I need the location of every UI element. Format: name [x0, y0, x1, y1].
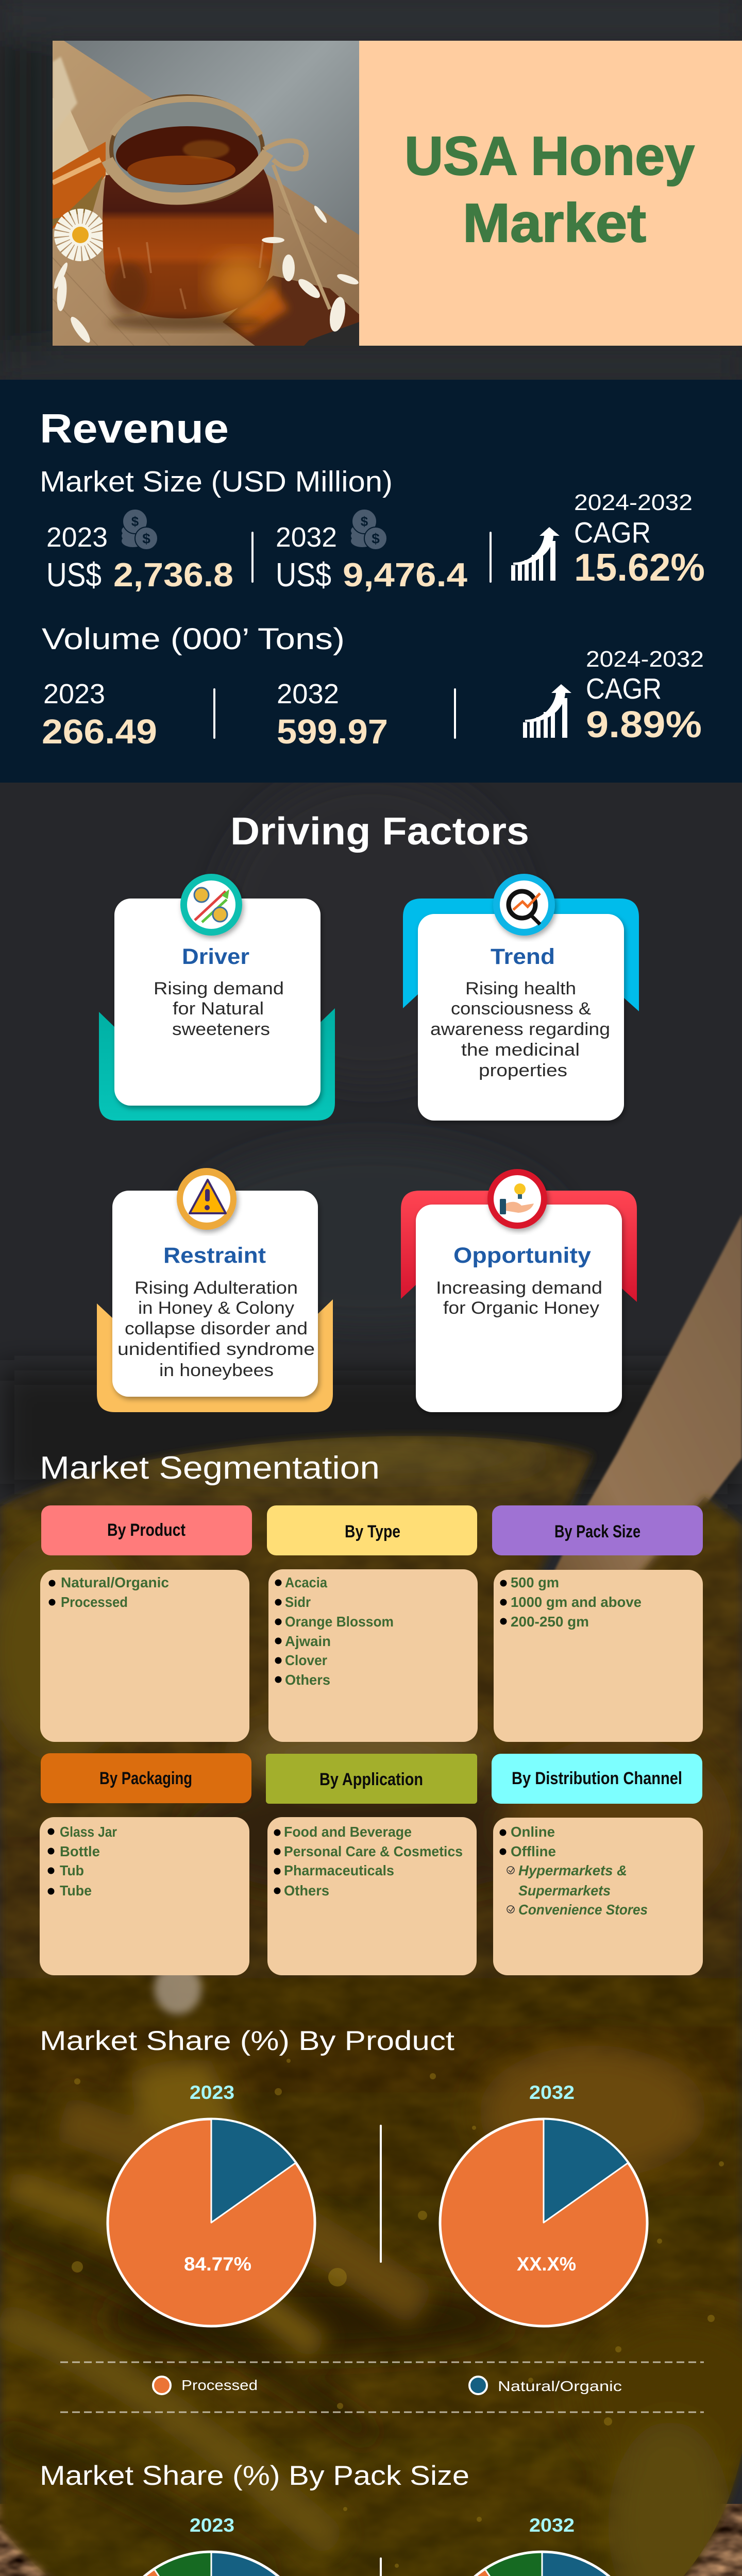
- icon: coins 2032: $: [372, 531, 380, 547]
- segment: by product: Processed: [61, 1594, 128, 1610]
- panel: trend: [403, 874, 639, 1121]
- icon: petals: [52, 205, 360, 345]
- heading: revenue: Revenue: [40, 405, 229, 451]
- year 2023: 2023: [190, 2515, 234, 2536]
- legend: product: Natural/Organic: [498, 2378, 622, 2394]
- volume 2032: [277, 679, 388, 751]
- segment: by application: Pharmaceuticals: [284, 1862, 394, 1878]
- CAGR market size: 15.62%: [574, 546, 705, 589]
- volume 2032: 2032: [277, 679, 339, 709]
- segment: by type: Ajwain: [285, 1633, 331, 1649]
- title panel: [359, 41, 742, 346]
- segment: by distribution channel: By Distribution Channel: [512, 1769, 682, 1788]
- segment: by distribution channel: Supermarkets: [518, 1883, 611, 1899]
- heading: market share by pack size: Market Share (%) By Pack Size: [40, 2461, 469, 2491]
- CAGR market size: CAGR: [574, 516, 651, 549]
- segment: by application: Personal Care & Cosmetics: [284, 1843, 463, 1859]
- volume 2023: 2023: [43, 679, 105, 709]
- market size 2032: 2032: [276, 522, 337, 553]
- heading: market segmentation: Market Segmentation: [40, 1450, 380, 1486]
- segment: by pack size: By Pack Size: [554, 1522, 640, 1541]
- market size 2032: 9,476.4: [343, 556, 467, 594]
- icon: growth arrow: [523, 684, 571, 738]
- driver text: sweeteners: [172, 1020, 270, 1039]
- title: [404, 126, 695, 253]
- segment: by pack size: 200-250 gm: [511, 1614, 589, 1630]
- hero photo: honey jar: [52, 41, 360, 346]
- icon: coins 2023: $: [131, 514, 139, 529]
- year 2032: 2032: [529, 2082, 575, 2103]
- icon: trend: [493, 874, 555, 936]
- trend text: the medicinal: [461, 1040, 580, 1060]
- volume 2023: [42, 679, 157, 751]
- icon: coins 2032: $: [361, 514, 368, 529]
- segment: by application: Others: [284, 1883, 329, 1899]
- divider: [454, 688, 456, 739]
- segment: by pack size: 1000 gm and above: [511, 1594, 642, 1610]
- restraint text: in Honey & Colony: [138, 1298, 294, 1318]
- opportunity text: [436, 1278, 602, 1318]
- segment: by application: Food and Beverage: [284, 1824, 412, 1840]
- market size 2023: 2,736.8: [113, 556, 233, 594]
- segment: by type: Orange Blossom: [285, 1614, 394, 1630]
- trend heading: Trend: [491, 944, 555, 969]
- market size 2032: US$: [276, 556, 331, 594]
- opportunity text: for Organic Honey: [443, 1298, 599, 1318]
- segment: by type: [267, 1505, 478, 1742]
- heading: market size: Market Size (USD Million): [40, 465, 393, 498]
- divider: [251, 532, 254, 583]
- segment: by product: [40, 1505, 252, 1742]
- panel: opportunity: [401, 1169, 637, 1412]
- segment: by pack size: 500 gm: [511, 1574, 559, 1590]
- segment: by distribution channel: [492, 1754, 703, 1975]
- panel: revenue: [0, 380, 742, 783]
- segment: by type: Acacia: [285, 1574, 327, 1590]
- opportunity heading: Opportunity: [453, 1243, 591, 1268]
- CAGR volume: CAGR: [586, 672, 662, 705]
- icon: daisy: [62, 216, 99, 253]
- icon: coins 2023: [122, 509, 158, 550]
- trend text: consciousness &: [451, 999, 591, 1019]
- segment: by type: Others: [285, 1672, 330, 1688]
- segment: by distribution channel: Convenience Stores: [518, 1902, 648, 1918]
- segment: by type: By Type: [345, 1522, 400, 1541]
- segment: by packaging: Bottle: [60, 1843, 100, 1859]
- heading: volume: Volume (000’ Tons): [42, 622, 345, 656]
- panel: restraint: [97, 1168, 333, 1412]
- restraint text: [117, 1278, 315, 1380]
- restraint text: collapse disorder and: [125, 1319, 308, 1338]
- pie chart: product 2032: [440, 2119, 647, 2326]
- segment: by packaging: Glass Jar: [60, 1824, 117, 1840]
- pie chart: pack size 2023: [107, 2552, 315, 2576]
- volume 2032: 599.97: [277, 713, 388, 751]
- pie chart: pack size 2032: [438, 2552, 646, 2576]
- segment: by application: [266, 1754, 477, 1975]
- segment: by packaging: [40, 1753, 251, 1975]
- icon: opportunity: [487, 1169, 547, 1229]
- market size 2032: [276, 522, 467, 594]
- pie chart: product 2023: [108, 2119, 315, 2326]
- legend: product: Processed: [181, 2377, 258, 2393]
- market size 2023: 2023: [46, 522, 108, 553]
- panel: driver: [99, 874, 335, 1121]
- trend text: awareness regarding: [430, 1020, 610, 1039]
- title: Market: [463, 193, 646, 253]
- icon: jar: [103, 96, 274, 318]
- segment: by pack size: [492, 1505, 703, 1742]
- icon: honeycomb: [53, 57, 109, 229]
- segment: by product: Natural/Organic: [61, 1574, 169, 1590]
- heading: market share by product: Market Share (%) By Product: [40, 2026, 454, 2056]
- volume 2023: 266.49: [42, 713, 157, 751]
- market size 2023: [46, 522, 233, 594]
- trend text: [430, 979, 610, 1080]
- icon: twine: [107, 99, 330, 309]
- segment: by packaging: Tube: [60, 1883, 92, 1899]
- restraint text: unidentified syndrome: [117, 1340, 315, 1359]
- CAGR volume: 9.89%: [586, 704, 702, 745]
- segment: by type: Sidr: [285, 1594, 311, 1610]
- icon: restraint: [177, 1168, 237, 1230]
- pie chart: product 2032: XX.X%: [517, 2253, 576, 2275]
- icon: wood block: [223, 276, 359, 346]
- segment: by product: By Product: [107, 1520, 185, 1540]
- icon: growth arrow: [511, 527, 560, 581]
- divider: [213, 688, 215, 739]
- segment: by distribution channel: Hypermarkets &: [518, 1862, 627, 1878]
- segment: by application: By Application: [319, 1770, 423, 1789]
- segment: by distribution channel: Offline: [511, 1843, 556, 1859]
- driver heading: Driver: [182, 944, 249, 969]
- CAGR volume: 2024-2032: [586, 647, 704, 672]
- CAGR market size: 2024-2032: [574, 490, 693, 515]
- heading: driving factors: Driving Factors: [230, 809, 529, 853]
- restraint text: in honeybees: [159, 1361, 274, 1380]
- trend text: Rising health: [465, 979, 576, 998]
- title: USA Honey: [404, 126, 695, 187]
- driver text: Rising demand: [154, 979, 284, 998]
- segment: by distribution channel: Online: [511, 1824, 555, 1840]
- icon: coins 2032: [351, 509, 387, 550]
- icon: coins 2023: $: [142, 531, 150, 547]
- restraint heading: Restraint: [163, 1243, 266, 1268]
- segment: by packaging: Tub: [60, 1862, 84, 1878]
- CAGR market size: [574, 490, 705, 589]
- restraint text: Rising Adulteration: [134, 1278, 298, 1298]
- CAGR volume: [586, 647, 704, 745]
- icon: driver: [180, 874, 242, 936]
- opportunity text: Increasing demand: [436, 1278, 602, 1298]
- divider: [490, 532, 492, 583]
- legend: product: [153, 2377, 622, 2394]
- year 2032: 2032: [529, 2515, 575, 2536]
- year 2023: 2023: [190, 2082, 234, 2103]
- driver text: for Natural: [173, 999, 264, 1019]
- market size 2023: US$: [46, 556, 102, 594]
- trend text: properties: [479, 1061, 567, 1080]
- segment: by type: Clover: [285, 1652, 327, 1668]
- driver text: [154, 979, 284, 1039]
- pie chart: product 2023: 84.77%: [184, 2253, 251, 2275]
- segment: by packaging: By Packaging: [99, 1769, 192, 1788]
